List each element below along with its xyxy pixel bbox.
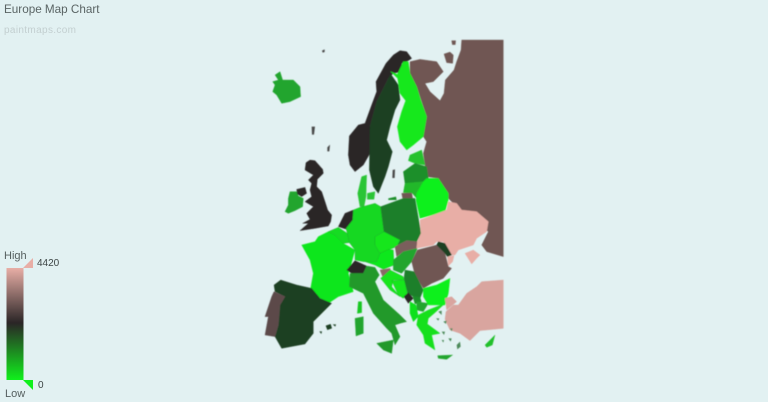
Sardinia <box>355 317 363 336</box>
Lithuania <box>403 182 424 198</box>
Turkish Thrace <box>445 297 457 310</box>
Serbia <box>404 270 423 298</box>
value high: 4420 <box>37 258 60 269</box>
map of Europe <box>265 40 503 359</box>
Switzerland <box>347 261 367 274</box>
Iceland <box>273 72 301 103</box>
Czechia <box>375 232 400 253</box>
high marker <box>23 258 33 268</box>
Aegean islands <box>436 311 461 349</box>
label high: High <box>4 250 27 262</box>
Netherlands <box>338 210 353 229</box>
Turkey <box>445 280 503 341</box>
Hungary <box>393 248 417 273</box>
Belarus <box>416 178 448 218</box>
low marker <box>23 380 33 390</box>
label low: Low <box>5 388 25 400</box>
source credit: paintmaps.com <box>4 25 76 36</box>
Russia <box>402 40 503 257</box>
legend <box>4 250 60 400</box>
Balearic Islands <box>319 324 336 334</box>
Norway <box>348 51 412 172</box>
Cyprus <box>485 335 495 347</box>
Croatia <box>381 270 404 297</box>
Spain <box>274 280 332 348</box>
Moldova <box>437 242 452 257</box>
Denmark <box>358 175 375 207</box>
Montenegro <box>404 293 413 303</box>
Svalbard, Faroe and Shetland specks <box>312 49 395 178</box>
Northern Ireland <box>297 187 307 197</box>
Sicily <box>377 340 393 353</box>
Corsica <box>357 302 362 313</box>
Sweden <box>369 74 400 193</box>
Crete <box>438 355 453 359</box>
Belgium <box>328 227 349 243</box>
Macedonia <box>417 302 428 312</box>
Bosnia <box>392 280 407 298</box>
Slovenia <box>380 268 392 278</box>
Kosovo <box>413 296 421 304</box>
Italy <box>349 266 407 345</box>
Ireland <box>285 192 303 213</box>
Odessa coast <box>447 256 454 266</box>
northern Europe <box>273 40 503 257</box>
Greece <box>417 303 445 350</box>
title: Europe Map Chart <box>4 3 100 16</box>
Slovakia <box>395 241 417 257</box>
legend colour bar <box>6 268 24 380</box>
Portugal <box>265 292 285 337</box>
Crimea <box>465 250 480 264</box>
Germany <box>346 203 384 262</box>
Latvia <box>403 163 428 183</box>
Bulgaria <box>423 278 450 305</box>
Great Britain <box>300 160 332 231</box>
Estonia <box>408 150 425 165</box>
Poland <box>381 198 421 247</box>
Austria <box>365 249 394 269</box>
Romania <box>412 245 452 288</box>
value low: 0 <box>38 380 44 391</box>
France <box>302 232 355 303</box>
Swedish island <box>388 197 397 200</box>
Albania <box>410 302 418 322</box>
Ukraine <box>417 202 488 255</box>
Finland <box>391 62 427 150</box>
central and southern Europe <box>265 160 503 359</box>
